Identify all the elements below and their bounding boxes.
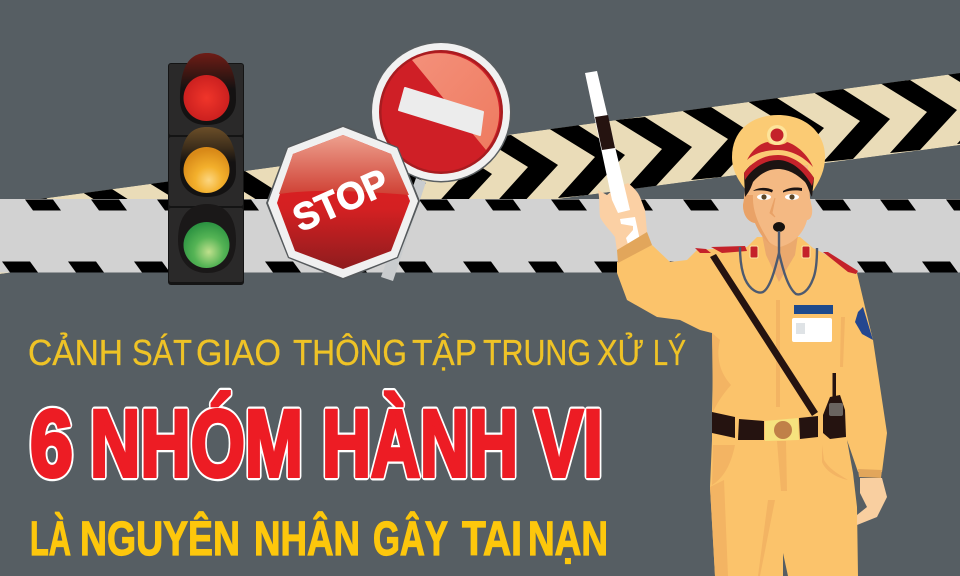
hat emblem xyxy=(767,125,787,145)
head xyxy=(732,115,825,247)
title line 1: LÝ xyxy=(653,332,686,373)
right hand xyxy=(857,478,887,525)
right sleeve cuff xyxy=(858,469,882,478)
whistle lanyard xyxy=(740,231,817,294)
title line 3: GÂY xyxy=(373,511,448,566)
title line 2: NHÓM xyxy=(90,391,303,497)
title line 2: HÀNH xyxy=(322,391,518,497)
uniform body xyxy=(617,237,887,576)
title line 2: NHÓM xyxy=(90,391,303,497)
title line 1: THÔNG xyxy=(293,332,407,373)
icon: stop sign xyxy=(266,125,420,280)
hair xyxy=(744,158,814,197)
belt xyxy=(712,412,818,441)
collar badges xyxy=(750,246,810,258)
neck xyxy=(762,235,798,282)
baton and raised hand xyxy=(585,71,647,254)
body shading xyxy=(710,300,848,576)
face xyxy=(743,165,812,247)
title line 1: XỬ xyxy=(597,331,644,373)
name badge xyxy=(792,305,833,342)
horizontal striped band xyxy=(0,199,960,272)
traffic police officer xyxy=(585,71,887,576)
title line 2: HÀNH xyxy=(322,391,518,497)
title line 1: GIAO xyxy=(196,332,281,373)
icon: no entry round sign xyxy=(370,42,512,182)
chevron barrier tape xyxy=(0,71,960,274)
hat band xyxy=(747,142,813,167)
title line 3: NHÂN xyxy=(254,511,360,566)
icon: traffic light xyxy=(168,53,244,285)
white bar xyxy=(399,88,483,135)
sleeve cuff xyxy=(617,232,652,263)
title line 1: SÁT xyxy=(132,332,192,373)
title line 3 xyxy=(30,511,608,566)
brows xyxy=(753,187,802,192)
icon: sign pole xyxy=(381,178,426,281)
title line 3: NGUYÊN xyxy=(80,511,240,566)
epaulettes xyxy=(695,246,858,274)
title line 3: LÀ xyxy=(30,512,71,566)
title line 1: CẢNH xyxy=(28,332,123,373)
sleeve patch xyxy=(855,307,873,340)
title line 2: VI xyxy=(535,391,603,497)
hat crown xyxy=(732,115,825,191)
title line 3: NẠN xyxy=(528,513,608,566)
shoulder strap xyxy=(710,254,818,416)
red lamp xyxy=(184,75,230,121)
radio xyxy=(823,373,846,439)
stop label: STOP xyxy=(287,162,395,241)
title line 3: TAI xyxy=(462,513,522,566)
title line 1 xyxy=(28,331,686,373)
whistle xyxy=(773,222,785,232)
title line 2: 6 xyxy=(30,391,73,497)
eyes xyxy=(757,194,771,200)
green lamp xyxy=(184,222,230,268)
yellow lamp xyxy=(184,147,230,193)
title line 1: TẬP xyxy=(412,332,477,373)
title line 2: 6 xyxy=(30,391,73,497)
title line 2 xyxy=(30,391,603,497)
title line 2: VI xyxy=(535,391,603,497)
title line 1: TRUNG xyxy=(483,332,591,373)
